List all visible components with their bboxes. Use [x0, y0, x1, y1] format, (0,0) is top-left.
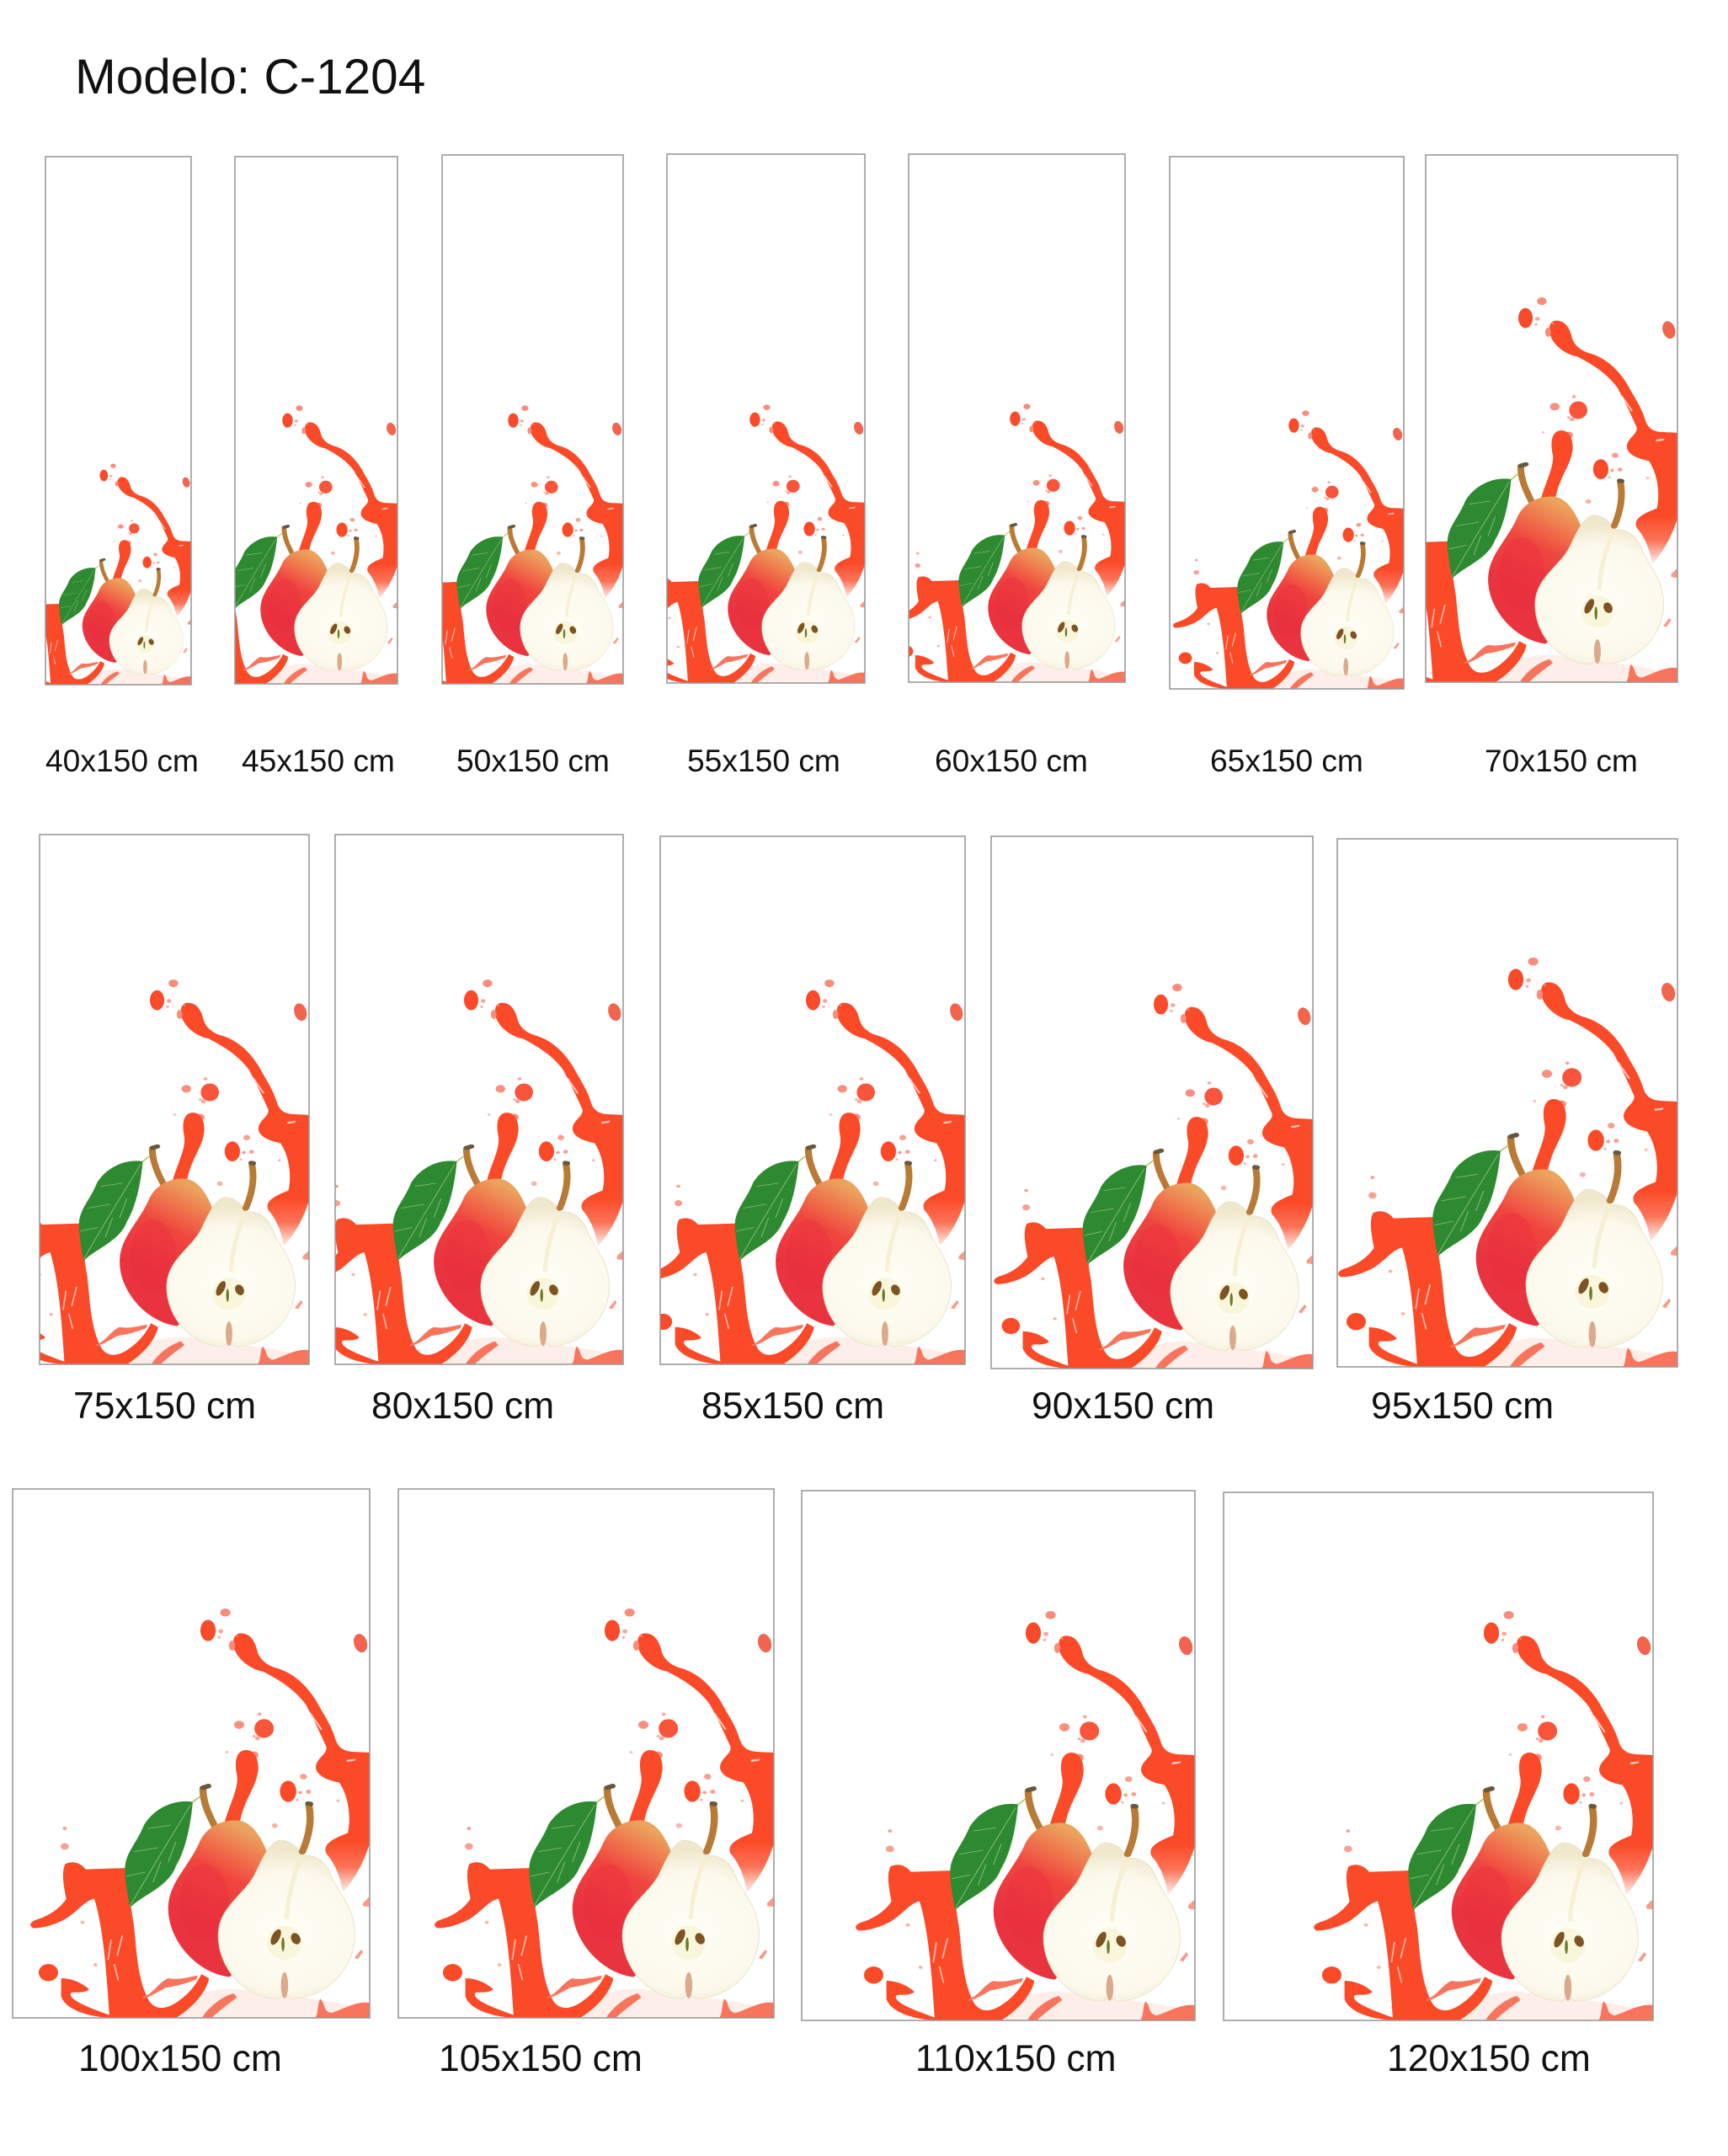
label: 90x150 cm: 90x150 cm	[1032, 1385, 1214, 1427]
panel: 105x150	[398, 1489, 774, 2018]
panel: 50x150	[441, 154, 624, 685]
panel: 90x150	[991, 836, 1313, 1369]
artwork: pears and splash	[667, 404, 864, 682]
panel: 60x150	[894, 154, 1125, 682]
label: 70x150 cm: 70x150 cm	[1485, 743, 1638, 778]
label: 55x150 cm: 55x150 cm	[687, 743, 840, 778]
panel: 40x150	[45, 156, 192, 686]
panel: 85x150	[646, 836, 965, 1364]
panel: 70x150	[1425, 154, 1678, 683]
label: 110x150 cm: 110x150 cm	[915, 2038, 1117, 2079]
label: 45x150 cm: 45x150 cm	[242, 743, 395, 778]
panel: 75x150	[39, 834, 310, 1365]
label: 50x150 cm: 50x150 cm	[456, 743, 610, 778]
artwork: pears and splash	[1173, 410, 1404, 689]
artwork: pears and splash	[646, 979, 965, 1364]
artwork: pears and splash	[435, 1609, 774, 2018]
label: 105x150 cm: 105x150 cm	[439, 2038, 643, 2079]
artwork: pears and splash	[335, 979, 623, 1364]
artwork: pears and splash	[894, 403, 1125, 682]
artwork: pears and splash	[30, 1609, 370, 2018]
panel: 80x150	[304, 835, 623, 1364]
title: Modelo: C-1204	[75, 50, 425, 104]
panel: 100x150	[13, 1489, 370, 2018]
artwork: pears and splash	[1314, 1611, 1653, 2020]
panel: 55x150	[666, 153, 866, 684]
panel: 65x150	[1170, 157, 1404, 689]
artwork: pears and splash	[856, 1611, 1195, 2020]
label: 40x150 cm: 40x150 cm	[45, 743, 199, 778]
label: 95x150 cm: 95x150 cm	[1371, 1385, 1554, 1427]
label: 85x150 cm: 85x150 cm	[701, 1385, 884, 1427]
artwork: pears and splash	[1338, 958, 1677, 1367]
panel: 120x150	[1224, 1492, 1653, 2020]
artwork: pears and splash	[45, 463, 190, 684]
label: 60x150 cm: 60x150 cm	[935, 743, 1088, 778]
label: 80x150 cm: 80x150 cm	[371, 1385, 554, 1427]
artwork: pears and splash	[443, 405, 623, 684]
label: 120x150 cm: 120x150 cm	[1387, 2038, 1591, 2079]
artwork: pears and splash	[40, 979, 308, 1364]
artwork: pears and splash	[236, 405, 397, 684]
panel: 95x150	[1337, 839, 1677, 1367]
artwork: pears and splash	[1427, 297, 1677, 682]
panel: 45x150	[234, 156, 398, 685]
label: 100x150 cm: 100x150 cm	[78, 2038, 282, 2079]
label: 75x150 cm: 75x150 cm	[73, 1385, 256, 1427]
panel: 110x150	[802, 1491, 1195, 2020]
label: 65x150 cm: 65x150 cm	[1210, 743, 1363, 778]
artwork: pears and splash	[994, 984, 1313, 1369]
